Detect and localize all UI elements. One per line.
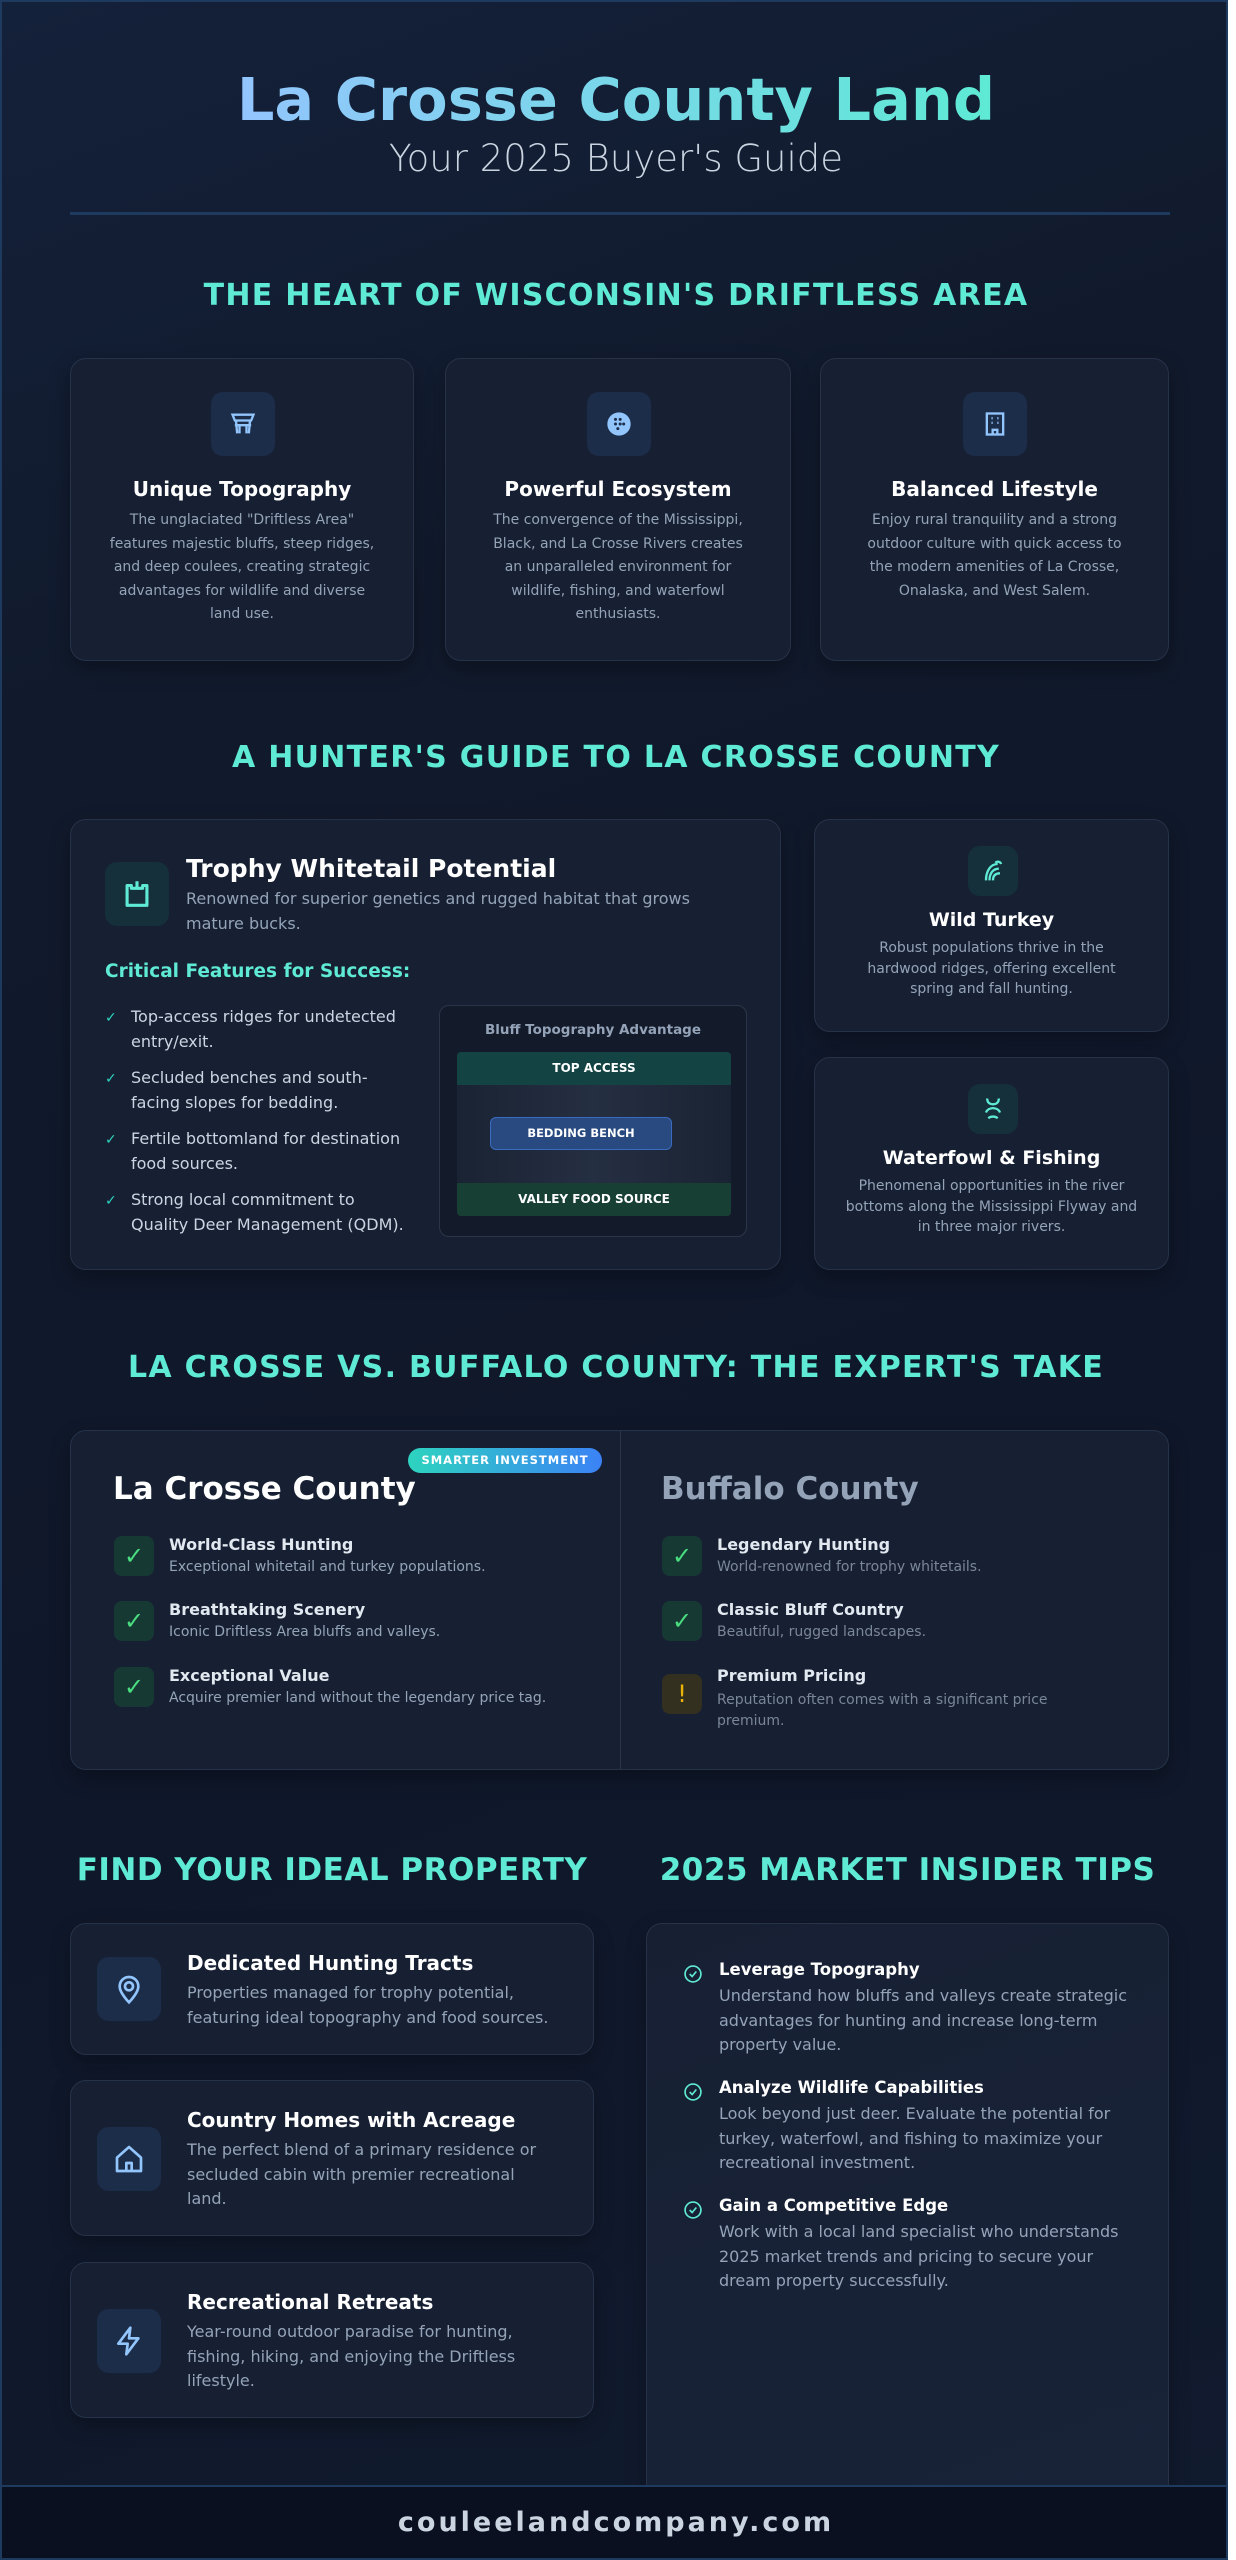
badge: smarter investment bbox=[408, 1448, 602, 1473]
column: buffalo: ✓ bbox=[672, 1542, 692, 1570]
tip: wildlife: Look beyond just deer. Evaluate the potential for turkey, waterfowl, and fishing to maximize your recreational investment. bbox=[719, 2104, 1110, 2172]
tip: wildlife: Analyze Wildlife Capabilities bbox=[719, 2078, 984, 2097]
title: La Crosse County Land bbox=[237, 65, 995, 134]
panel: waterfowl: Phenomenal opportunities in the river bottoms along the Mississippi Flyway and in three major rivers. bbox=[846, 1178, 1137, 1235]
panel: waterfowl bbox=[814, 1057, 1169, 1270]
column: buffalo: Legendary Hunting bbox=[717, 1535, 890, 1554]
column: buffalo: ! bbox=[677, 1680, 687, 1708]
column: la crosse: Acquire premier land without the legendary price tag. bbox=[169, 1690, 546, 1706]
column: buffalo: Beautiful, rugged landscapes. bbox=[717, 1624, 926, 1640]
column: la crosse: Exceptional Value bbox=[169, 1666, 329, 1685]
column: buffalo: Classic Bluff Country bbox=[717, 1600, 904, 1619]
icon: whitetail bbox=[105, 862, 169, 926]
icon: map pin bbox=[97, 1957, 161, 2021]
panel: waterfowl: Waterfowl & Fishing bbox=[883, 1147, 1100, 1169]
column: la crosse: Breathtaking Scenery bbox=[169, 1600, 365, 1619]
list: features: ✓ bbox=[105, 1071, 117, 1087]
badge: smarter investment: SMARTER INVESTMENT bbox=[421, 1453, 589, 1467]
column: buffalo: Buffalo County bbox=[661, 1471, 919, 1507]
icon: globe bbox=[587, 392, 651, 456]
panel: country homes bbox=[70, 2080, 594, 2236]
heading: find property: FIND YOUR IDEAL PROPERTY bbox=[77, 1852, 587, 1888]
column: buffalo: ✓ bbox=[672, 1607, 692, 1635]
heading: hunter's guide: A HUNTER'S GUIDE TO LA CROSSE COUNTY bbox=[232, 740, 1000, 775]
icon: topography bbox=[211, 392, 275, 456]
list: features: Top-access ridges for undetected entry/exit. bbox=[131, 1007, 396, 1051]
column: la crosse: ✓ bbox=[124, 1607, 144, 1635]
tip: edge bbox=[684, 2196, 1118, 2290]
list: features: ✓ bbox=[105, 1010, 117, 1026]
panel: retreats: Year-round outdoor paradise for hunting, fishing, hiking, and enjoying the Driftless lifestyle. bbox=[187, 2322, 515, 2390]
list: features: Secluded benches and south-facing slopes for bedding. bbox=[131, 1068, 368, 1112]
panel: country homes: The perfect blend of a primary residence or secluded cabin with premier recreational land. bbox=[187, 2140, 536, 2208]
tip: edge: Gain a Competitive Edge bbox=[719, 2196, 948, 2215]
heading: driftless: THE HEART OF WISCONSIN'S DRIFTLESS AREA bbox=[204, 278, 1028, 313]
panel: comparison bbox=[70, 1430, 1169, 1770]
column: la crosse: ✓ bbox=[124, 1542, 144, 1570]
chart: bluff diagram bbox=[439, 1005, 747, 1237]
column: la crosse: Exceptional whitetail and turkey populations. bbox=[169, 1559, 486, 1575]
panel: hunting tracts: Dedicated Hunting Tracts bbox=[187, 1951, 473, 1975]
list: features bbox=[105, 1007, 404, 1234]
panel: trophy whitetail: Trophy Whitetail Potential bbox=[186, 854, 556, 883]
list: features: Strong local commitment to Quality Deer Management (QDM). bbox=[131, 1190, 404, 1234]
panel: wild turkey: Wild Turkey bbox=[929, 909, 1054, 931]
subtitle: Your 2025 Buyer's Guide bbox=[389, 137, 843, 180]
panel: retreats: Recreational Retreats bbox=[187, 2290, 433, 2314]
panel: unique topography bbox=[70, 358, 414, 661]
panel: retreats bbox=[70, 2262, 594, 2418]
icon: bolt bbox=[97, 2309, 161, 2373]
tip: wildlife bbox=[684, 2078, 1110, 2172]
column: buffalo: Premium Pricing bbox=[717, 1666, 866, 1685]
tip: edge: Work with a local land specialist who understands 2025 market trends and pricing to secure your dream property successfully. bbox=[719, 2222, 1118, 2290]
column: buffalo bbox=[661, 1471, 1048, 1729]
panel: unique topography: Unique Topography bbox=[133, 477, 351, 501]
panel: hunting tracts: Properties managed for trophy potential, featuring ideal topography and food sources. bbox=[187, 1983, 548, 2026]
panel: country homes: Country Homes with Acreage bbox=[187, 2108, 515, 2132]
panel: unique topography: The unglaciated "Driftless Area" features majestic bluffs, steep ridges, and deep coulees, creating strategic advantages for wildlife and diverse land use. bbox=[110, 512, 374, 622]
list: features: ✓ bbox=[105, 1132, 117, 1148]
chart: bluff diagram: TOP ACCESS bbox=[552, 1061, 636, 1075]
column: la crosse: World-Class Hunting bbox=[169, 1535, 353, 1554]
icon: building bbox=[963, 392, 1027, 456]
panel: wild turkey bbox=[814, 819, 1169, 1032]
panel: wild turkey: Robust populations thrive in the hardwood ridges, offering excellent spring and fall hunting. bbox=[867, 940, 1116, 997]
column: la crosse: ✓ bbox=[124, 1673, 144, 1701]
chart: bluff diagram: Bluff Topography Advantage bbox=[485, 1022, 701, 1038]
list: features: ✓ bbox=[105, 1193, 117, 1209]
panel: ecosystem bbox=[445, 358, 791, 661]
heading: market tips: 2025 MARKET INSIDER TIPS bbox=[660, 1852, 1155, 1888]
panel: lifestyle: Enjoy rural tranquility and a strong outdoor culture with quick access to the modern amenities of La Crosse, Onalaska, and West Salem. bbox=[867, 512, 1122, 598]
chart: bluff diagram: BEDDING BENCH bbox=[527, 1126, 635, 1140]
icon: turkey bbox=[968, 846, 1018, 896]
panel: lifestyle bbox=[820, 358, 1169, 661]
list: features: Fertile bottomland for destination food sources. bbox=[131, 1129, 400, 1173]
tip: topography: Leverage Topography bbox=[719, 1960, 920, 1979]
column: la crosse: Iconic Driftless Area bluffs and valleys. bbox=[169, 1624, 440, 1640]
footer: couleelandcompany.com bbox=[398, 2507, 834, 2538]
icon: waterfowl bbox=[968, 1084, 1018, 1134]
heading: comparison: LA CROSSE VS. BUFFALO COUNTY: THE EXPERT'S TAKE bbox=[128, 1350, 1104, 1385]
panel: lifestyle: Balanced Lifestyle bbox=[891, 477, 1098, 501]
tip: topography: Understand how bluffs and valleys create strategic advantages for hunting and increase long-term property value. bbox=[719, 1986, 1127, 2054]
panel: ecosystem: The convergence of the Mississippi, Black, and La Crosse Rivers creates an unparalleled environment for wildlife, fishing, and waterfowl enthusiasts. bbox=[493, 512, 743, 622]
panel: trophy whitetail: Renowned for superior genetics and rugged habitat that grows mature bucks. bbox=[186, 889, 690, 932]
tip: topography bbox=[684, 1960, 1127, 2054]
column: buffalo: World-renowned for trophy whitetails. bbox=[717, 1559, 982, 1575]
column: la crosse: La Crosse County bbox=[113, 1471, 416, 1507]
panel: hunting tracts bbox=[70, 1923, 594, 2055]
panel: market tips bbox=[646, 1923, 1169, 2503]
panel: ecosystem: Powerful Ecosystem bbox=[504, 477, 732, 501]
column: buffalo: Reputation often comes with a significant price premium. bbox=[717, 1692, 1048, 1729]
column: la crosse bbox=[113, 1471, 546, 1707]
chart: bluff diagram: VALLEY FOOD SOURCE bbox=[518, 1192, 670, 1206]
icon: house bbox=[97, 2127, 161, 2191]
panel: trophy whitetail bbox=[70, 819, 781, 1270]
panel: trophy whitetail: Critical Features for Success: bbox=[105, 961, 410, 982]
footer bbox=[2, 2485, 1230, 2560]
